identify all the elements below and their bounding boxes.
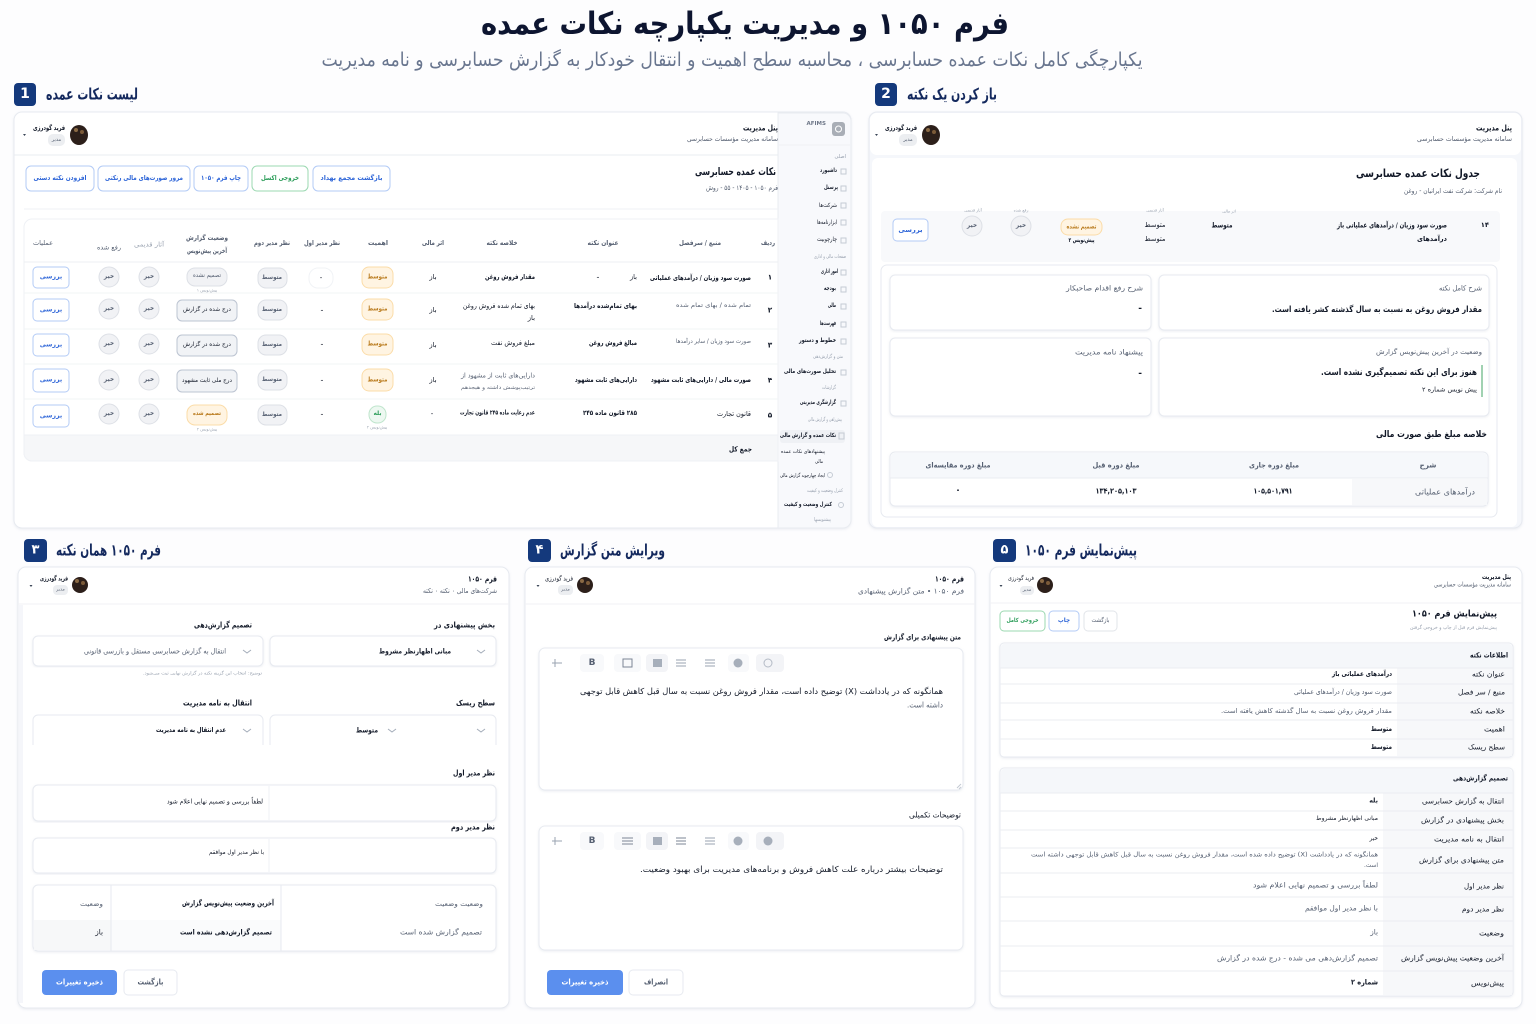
sidebar: گزارشات <box>822 384 836 391</box>
page heading: فرم ۱۰۵۰ - ۱۴۰۵ - ۵۵ - روش <box>706 184 778 192</box>
table: reporting decision: آخرین وضعیت پیش‌نویس گزارش <box>1401 952 1505 962</box>
table: reporting decision: پیش‌نویس <box>1471 978 1504 988</box>
card: client action: - <box>1138 304 1142 314</box>
card: status in latest draft: پیش نویس شماره ۲ <box>1422 386 1477 394</box>
table row 4: ۴ <box>768 376 773 384</box>
selected row band: درآمدهای <box>1417 234 1447 243</box>
table row 4: بررسی <box>40 376 62 384</box>
field: suggested section: مبانی اظهارنظر مشروط <box>379 646 451 656</box>
table row 2: ۲ <box>768 306 773 314</box>
table row 4: درج ملی ثابت مشهود <box>182 378 232 384</box>
table header: عملیات <box>33 239 53 247</box>
table row 1: متوسط <box>368 274 388 280</box>
selected row band: رفع شده <box>1014 208 1028 212</box>
selected row band: خیر <box>1015 223 1026 229</box>
table row 2: بهای تمام‌شده درآمدها <box>574 301 637 310</box>
sidebar: چارچوبیت <box>817 237 837 243</box>
sidebar: مالی <box>828 303 836 309</box>
table row 1: بررسی <box>40 274 62 280</box>
selected row band <box>881 208 1500 262</box>
table: reporting decision: بخش پیشنهادی در گزارش <box>1421 816 1504 824</box>
sidebar: تحلیل صورت‌های مالی <box>784 369 836 375</box>
field: risk level: متوسط <box>356 726 378 734</box>
preview heading <box>1410 608 1498 631</box>
status table: آخرین وضعیت پیش‌نویس گزارش <box>182 898 274 908</box>
table: reporting decision: وضعیت <box>1479 928 1504 938</box>
table: point information: سطح ریسک <box>1468 742 1505 752</box>
action buttons: خروجی اکسل <box>261 174 299 182</box>
table header: آثار قدیمی <box>134 240 164 248</box>
table row 1: - <box>597 272 600 282</box>
field: reporting decision <box>33 620 263 676</box>
status table: وضعیت <box>80 900 103 908</box>
table header: اهمیت <box>368 239 388 247</box>
amount table: شرح <box>1420 460 1436 470</box>
editor buttons: انصراف <box>644 978 668 986</box>
table row 4: دارایی‌های ثابت مشهود <box>575 376 637 384</box>
table: point information: منبع / سر فصل <box>1458 688 1505 696</box>
top bar: مدیر <box>902 137 913 143</box>
editor toolbar <box>552 654 784 672</box>
table row 3: مبلغ فروش نفت <box>491 339 535 347</box>
section heading 1: 1 <box>20 86 30 102</box>
table row 3: صورت سود وزیان / سایر درآمدها <box>676 337 751 345</box>
editor toolbar: B <box>589 658 596 668</box>
top bar <box>18 574 509 604</box>
editor: suggested text: متن پیشنهادی برای گزارش <box>884 632 961 642</box>
card: status in latest draft <box>1159 338 1489 416</box>
sidebar: نکات عمده و گزارش مالی <box>780 431 836 439</box>
sidebar: گزارشگری مدیریتی <box>800 398 836 406</box>
table row 3: باز <box>428 341 437 349</box>
preview buttons: خروجی کامل <box>1006 617 1038 624</box>
editor: additional notes <box>539 810 963 950</box>
sidebar: مالی <box>815 459 823 465</box>
form buttons: بازگشت <box>138 976 164 986</box>
sidebar: کنترل وضعیت و کیفیت <box>784 501 832 508</box>
card: full description: مقدار فروش روغن به نسبت به سال گذشته کشر یافته است. <box>1272 304 1482 315</box>
table row 1: باز <box>629 273 637 281</box>
top bar: سامانه مدیریت مؤسسات حسابرسی <box>1417 135 1512 143</box>
table total row <box>24 435 778 461</box>
selected row band: پیش‌نویس ۲ <box>1068 238 1094 244</box>
table row 5: تصمیم شده <box>193 411 221 417</box>
sidebar: امور اداری <box>821 269 838 275</box>
details card <box>881 265 1497 517</box>
card: full description <box>1159 275 1489 330</box>
table row 3: مبالغ فروش روغن <box>589 339 637 347</box>
table header: ردیف <box>761 239 775 247</box>
section heading 4: ۴ <box>536 542 544 558</box>
action buttons: مرور صورت‌های مالی رنکتی <box>105 174 183 182</box>
table row 2: متوسط <box>262 307 282 313</box>
table row 1: متوسط <box>262 275 282 281</box>
table row 4: خیر <box>143 377 154 383</box>
table: point information: درآمدهای عملیاتی باز <box>1331 669 1392 678</box>
field: first manager comment: لطفاً بررسی و تصمیم نهایی اعلام شود <box>167 796 263 806</box>
section heading 3: فرم ۱۰۵۰ همان نکته <box>56 540 161 560</box>
table header <box>24 233 778 262</box>
table row 1: باز <box>428 273 437 281</box>
action buttons: بازگشت مجمع بهداد <box>320 173 382 182</box>
top bar <box>875 123 1512 146</box>
sidebar: شرکت‌ها <box>819 202 837 209</box>
top bar: مدیر <box>560 588 570 592</box>
selected row band: بررسی <box>898 226 923 234</box>
amount table: درآمدهای عملیاتی <box>1415 486 1476 496</box>
table row 3: ۳ <box>768 340 773 350</box>
section heading 1: لیست نکات عمده <box>46 84 138 104</box>
field: risk level <box>270 698 496 745</box>
table row 3: متوسط <box>368 340 388 348</box>
section heading 5: پیش‌نمایش فرم ۱۰۵۰ <box>1025 540 1137 560</box>
amount table: مبلغ دوره مقایسه‌ای <box>926 460 990 470</box>
table row 5: ۵ <box>768 410 773 420</box>
table total row: جمع کل <box>729 444 752 454</box>
field: transfer to management letter: انتقال به نامه مدیریت <box>183 698 252 708</box>
table row 5: عدم رعایت ماده ۲۴۵ قانون تجارت <box>460 410 535 416</box>
amount table <box>890 452 1488 506</box>
table row 5: بررسی <box>40 412 62 420</box>
section heading 3 <box>24 539 161 562</box>
table: reporting decision: مبانی اظهارنظر مشروط <box>1316 816 1378 822</box>
table row 3: خیر <box>143 341 154 347</box>
top bar: فرید گودرزی <box>885 123 917 132</box>
sidebar: صفحات مالی و اداری <box>814 254 846 260</box>
table: reporting decision: لطفاً بررسی و تصمیم نهایی اعلام شود <box>1253 879 1378 890</box>
field: second manager comment: نظر مدیر دوم <box>451 822 495 832</box>
table row 3: - <box>321 340 324 348</box>
table: reporting decision: خیر <box>1368 836 1378 842</box>
table: point information <box>1000 643 1513 757</box>
sidebar <box>778 113 851 528</box>
amount heading: خلاصه مبلغ طبق صورت مالی <box>1376 430 1487 440</box>
table: point information: متوسط <box>1371 743 1392 751</box>
field: first manager comment <box>33 768 496 821</box>
top bar <box>990 573 1522 603</box>
field: transfer to management letter: عدم انتقال به نامه مدیریت <box>156 726 226 734</box>
sidebar: فهرست‌ها <box>820 321 836 327</box>
status table: تصمیم گزارش شده است <box>400 928 482 936</box>
table: reporting decision: نظر مدیر دوم <box>1462 904 1504 914</box>
amount table: مبلغ دوره قبل <box>1092 460 1140 470</box>
section heading 5: ۵ <box>1001 542 1009 558</box>
top bar: فرید گودرزی <box>545 574 573 582</box>
status table: باز <box>94 928 103 936</box>
table row 1: ۱ <box>768 272 772 282</box>
table row 2 <box>24 299 778 329</box>
table row 1: پیش‌نویس ۱ <box>197 288 217 292</box>
table: point information: اطلاعات نکته <box>1470 650 1508 660</box>
page heading <box>695 166 778 192</box>
sidebar: داشبورد <box>820 168 837 174</box>
table row 1: مقدار فروش روغن <box>485 273 535 281</box>
table row 5: خیر <box>143 411 154 417</box>
title: فرم ۱۰۵۰ و مدیریت یکپارچه نکات عمده <box>481 6 1009 42</box>
sidebar: بودجه <box>824 286 836 292</box>
table: reporting decision: شماره ۲ <box>1351 978 1378 986</box>
editor toolbar: B <box>589 836 596 846</box>
table: reporting decision: همانگونه که در یادداشت (X) توضیح داده شده است، مقدار فروش روغن نسبت به سال قبل کاهش قابل توجهی داشته است <box>1031 850 1378 858</box>
card: status in latest draft: هنوز برای این نکته تصمیم‌گیری نشده است. <box>1321 366 1477 378</box>
form buttons <box>42 970 177 995</box>
table: reporting decision <box>1000 768 1513 996</box>
top bar: پنل مدیریت <box>743 124 778 132</box>
editor: additional notes: توضیحات بیشتر درباره علت کاهش فروش و برنامه‌های مدیریت برای بهبود وضعیت. <box>640 864 944 874</box>
sidebar: ابزارنامه‌ها <box>817 220 837 226</box>
sidebar: متن و گزارش‌دهی <box>813 353 843 360</box>
field: second manager comment: با نظر مدیر اول موافقم <box>209 850 264 856</box>
table: point information: اهمیت <box>1484 724 1505 734</box>
card: full description: شرح کامل نکته <box>1439 284 1482 292</box>
table header: خلاصه نکته <box>486 239 518 247</box>
table row 5: - <box>431 410 434 418</box>
status table: وضعیت وضعیت <box>435 900 483 908</box>
section heading 2: 2 <box>881 86 891 102</box>
preview heading: پیش‌نمایش فرم قبل از چاپ و خروجی گرفتن <box>1410 624 1498 631</box>
table: reporting decision: متن پیشنهادی برای گزارش <box>1419 856 1504 864</box>
card: status in latest draft: وضعیت در آخرین پیش‌نویس گزارش <box>1376 347 1482 356</box>
editor buttons <box>547 970 683 995</box>
top bar: مدیر <box>55 588 65 592</box>
selected row band: ۱۴ <box>1481 221 1489 229</box>
card: management letter suggestion <box>890 338 1151 416</box>
card: client action <box>890 275 1151 330</box>
table: reporting decision: بله <box>1369 798 1378 804</box>
table: point information: مقدار فروش روغن نسبت به سال گذشته کاهش یافته است. <box>1221 706 1392 715</box>
table: reporting decision: تصمیم گزارش‌دهی <box>1453 774 1508 782</box>
top bar: فرید گودرزی <box>1008 574 1034 582</box>
table row 2: خیر <box>103 306 114 312</box>
table: point information: متوسط <box>1371 725 1392 733</box>
top bar: پنل مدیریت <box>1482 573 1511 581</box>
table row 3: درج شده در گزارش <box>183 340 231 348</box>
top bar: فرید گودرزی <box>40 574 68 582</box>
table row 1 <box>24 267 778 293</box>
table row 1: خیر <box>103 274 114 280</box>
table: point information: خلاصه نکته <box>1470 706 1505 716</box>
sidebar: کنترل وضعیت و کیفیت <box>807 488 843 494</box>
table header: رفع شده <box>97 244 121 252</box>
sidebar: ایجاد چهارچوبه گزارش مالی <box>780 472 825 479</box>
field: risk level: سطح ریسک <box>456 698 495 708</box>
table row 3: خیر <box>103 341 114 347</box>
table row 5: ۲۸۵ قانون ماده ۲۴۵ <box>583 409 637 417</box>
table: reporting decision: انتقال به نامه مدیریت <box>1434 834 1504 844</box>
page heading <box>1356 166 1502 195</box>
selected row band: متوسط <box>1144 235 1166 243</box>
sidebar: پیشنویسها <box>814 517 831 523</box>
table row 5: پیش‌نویس ۲ <box>197 426 217 432</box>
table: point information: صورت سود وزیان / درآمدهای عملیاتی <box>1294 687 1392 696</box>
table row 2: درج شده در گزارش <box>183 305 231 313</box>
editor toolbar <box>552 832 784 850</box>
table row 4: - <box>321 376 324 384</box>
card: management letter suggestion: - <box>1138 369 1142 379</box>
editor: suggested text: داشته است. <box>907 700 943 710</box>
table of key points <box>24 219 778 461</box>
table row 5: بله <box>373 411 382 417</box>
selected row band: آثار قدیمی <box>964 208 983 212</box>
form buttons: ذخیره تغییرات <box>56 978 103 986</box>
table row 1: تصمیم نشده <box>193 273 221 279</box>
selected row band: متوسط <box>1144 221 1166 229</box>
table row 4: خیر <box>103 377 114 383</box>
table row 4: صورت مالی / دارایی‌های ثابت مشهود <box>651 376 751 384</box>
table row 3 <box>24 334 778 364</box>
page heading: نام شرکت: شرکت نفت ایرانیان - روغن <box>1404 187 1502 195</box>
table row 5 <box>33 404 773 432</box>
top bar: مدیر <box>51 137 62 143</box>
table row 4: باز <box>428 376 437 384</box>
table header: آخرین پیش‌نویس <box>187 246 227 255</box>
table row 4 <box>24 369 778 399</box>
selected row band: تصمیم نشده <box>1066 224 1096 230</box>
card: client action: شرح رفع اقدام صاحبکار <box>1065 284 1143 292</box>
table row 2: بهای تمام شده فروش روغن <box>463 302 535 310</box>
table row 5: خیر <box>103 411 114 417</box>
table row 4: متوسط <box>368 376 388 384</box>
table: reporting decision: تصمیم گزارش‌دهی می شده - درج شده در گزارش <box>1217 954 1378 962</box>
table row 2: - <box>321 306 324 314</box>
table: reporting decision: انتقال به گزارش حسابرسی <box>1422 796 1504 806</box>
field: suggested section <box>270 620 496 666</box>
panel: form 1050 preview <box>990 567 1522 1008</box>
table: reporting decision: با نظر مدیر اول موافقم <box>1305 904 1378 912</box>
status table <box>33 885 496 951</box>
field: second manager comment <box>33 822 496 873</box>
sidebar: خطوط و دستور <box>798 338 836 344</box>
page heading: جدول نکات عمده حسابرسی <box>1356 166 1480 181</box>
table row 2: متوسط <box>368 306 388 312</box>
section heading 4: ویرایش متن گزارش <box>560 540 665 560</box>
table header: نظر مدیر دوم <box>254 239 290 247</box>
card: management letter suggestion: پیشنهاد نامه مدیریت <box>1075 348 1143 356</box>
top bar: فرم ۱۰۵۰ <box>468 574 497 584</box>
table row 5: قانون تجارت <box>717 410 751 418</box>
top bar <box>14 123 778 155</box>
table: point information: عنوان نکته <box>1472 670 1505 678</box>
table row 1: خیر <box>143 274 154 280</box>
section heading 2: باز کردن یک نکته <box>907 84 997 104</box>
table header: وضعیت گزارش <box>186 233 228 242</box>
selected row band: خیر <box>966 223 977 229</box>
table row 5: پیش‌نویس ۲ <box>367 424 387 430</box>
top bar: پنل مدیریت <box>1476 124 1512 132</box>
top bar: فرید گودرزی <box>33 123 65 132</box>
field: transfer to management letter <box>33 698 263 745</box>
preview buttons: بازگشت <box>1092 616 1110 624</box>
selected row band: صورت سود وزیان / درآمدهای عملیاتی باز <box>1336 220 1447 230</box>
table row 3: متوسط <box>262 342 282 348</box>
section heading 3: ۳ <box>32 542 40 558</box>
amount table: مبلغ دوره جاری <box>1249 460 1299 470</box>
action buttons <box>26 166 390 191</box>
top bar: مدیر <box>1022 588 1032 593</box>
section heading 4 <box>528 539 665 562</box>
panel: edit report text <box>525 567 975 1008</box>
selected row band: متوسط <box>1212 220 1232 230</box>
action buttons: افزودن نکته دستی <box>34 174 86 182</box>
table header: اثر مالی <box>422 239 444 247</box>
field: reporting decision: انتقال به گزارش حسابرسی مستقل و بازرسی قانونی <box>84 646 226 656</box>
table: reporting decision: باز <box>1369 928 1378 936</box>
top bar: سامانه مدیریت مؤسسات حسابرسی <box>1434 582 1511 588</box>
selected row band: آثار قدیمی <box>1146 208 1165 212</box>
editor: additional notes: توضیحات تکمیلی <box>909 810 961 820</box>
table row 2: بررسی <box>40 306 62 314</box>
top bar: سامانه مدیریت مؤسسات حسابرسی <box>687 135 778 143</box>
table row 3: بررسی <box>40 342 62 348</box>
table row 5: متوسط <box>262 412 282 418</box>
section heading 5 <box>993 539 1137 562</box>
table header: عنوان نکته <box>588 239 618 247</box>
amount table: ۰ <box>955 486 961 496</box>
editor buttons: ذخیره تغییرات <box>562 978 608 986</box>
table row 5: - <box>321 410 324 418</box>
amount table: ۱۳۴,۲۰۵,۱۰۳ <box>1096 486 1137 496</box>
preview heading: پیش‌نمایش فرم ۱۰۵۰ <box>1412 608 1497 620</box>
top bar: شرکت‌های مالی ۰ نکته ۰ نکته <box>423 587 497 595</box>
table row 4: دارایی‌های ثابت از مشهود از <box>460 372 535 380</box>
field: reporting decision: تصمیم گزارش‌دهی <box>194 620 252 630</box>
subtitle: یکپارچگی کامل نکات عمده حسابرسی ، محاسبه سطح اهمیت و انتقال خودکار به گزارش حسابرسی و نامه مدیریت <box>322 48 1142 71</box>
field: first manager comment: نظر مدیر اول <box>453 768 495 778</box>
table: reporting decision: نظر مدیر اول <box>1464 882 1504 890</box>
table row 2: باز <box>428 306 437 314</box>
sidebar: AFIMS <box>806 121 826 127</box>
table header: منبع / سرفصل <box>679 239 721 247</box>
sidebar: پیش‌راهی و گزارش مالی <box>808 416 842 423</box>
table row 1: صورت سود وزیان / درآمدهای عملیاتی <box>650 273 751 282</box>
action buttons: چاپ فرم ۱۰۵۰ <box>201 174 241 182</box>
table: reporting decision: است. <box>1364 863 1378 869</box>
table row 2: خیر <box>143 306 154 312</box>
section heading 1 <box>14 83 138 106</box>
panel: list of key points <box>14 112 851 528</box>
status table: تصمیم گزارش‌دهی نشده است <box>180 928 272 936</box>
table row 2: تمام شده / بهای تمام شده <box>676 303 751 309</box>
amount table: ۱۰۵,۵۰۱,۷۹۱ <box>1254 486 1292 496</box>
sidebar: پرسنل <box>824 185 838 191</box>
table header: نظر مدیر اول <box>304 239 340 247</box>
table row 4: متوسط <box>262 377 282 383</box>
sidebar: پیشنهادهای نکات عمده <box>781 449 826 455</box>
panel: form 1050 of same point <box>18 567 509 1008</box>
table row 4: ترتیب‌پوشش داشته و هیجدهم <box>461 385 536 391</box>
section heading 2 <box>875 83 997 106</box>
top bar: فرم ۱۰۵۰ <box>935 574 964 584</box>
field: suggested section: بخش پیشنهادی در <box>433 620 495 630</box>
page heading: نکات عمده حسابرسی <box>695 166 776 178</box>
top bar <box>525 574 975 604</box>
table row 1: - <box>320 274 323 282</box>
editor: suggested text <box>539 632 963 790</box>
preview buttons <box>1000 611 1117 631</box>
preview buttons: چاپ <box>1058 618 1070 624</box>
field: reporting decision: توضیح: انتخاب این گزینه نکته در گزارش نهایی ثبت می‌شود. <box>143 670 263 676</box>
panel: open one point <box>869 112 1522 528</box>
table row 2: باز <box>527 314 535 322</box>
sidebar: اصلی <box>835 154 846 160</box>
top bar: فرم ۱۰۵۰ • متن گزارش پیشنهادی <box>858 586 964 596</box>
editor: suggested text: همانگونه که در یادداشت (X) توضیح داده است، مقدار فروش روغن نسبت به سال قبل کاهش قابل توجهی <box>580 686 943 696</box>
selected row band: اثر مالی <box>1222 208 1236 214</box>
